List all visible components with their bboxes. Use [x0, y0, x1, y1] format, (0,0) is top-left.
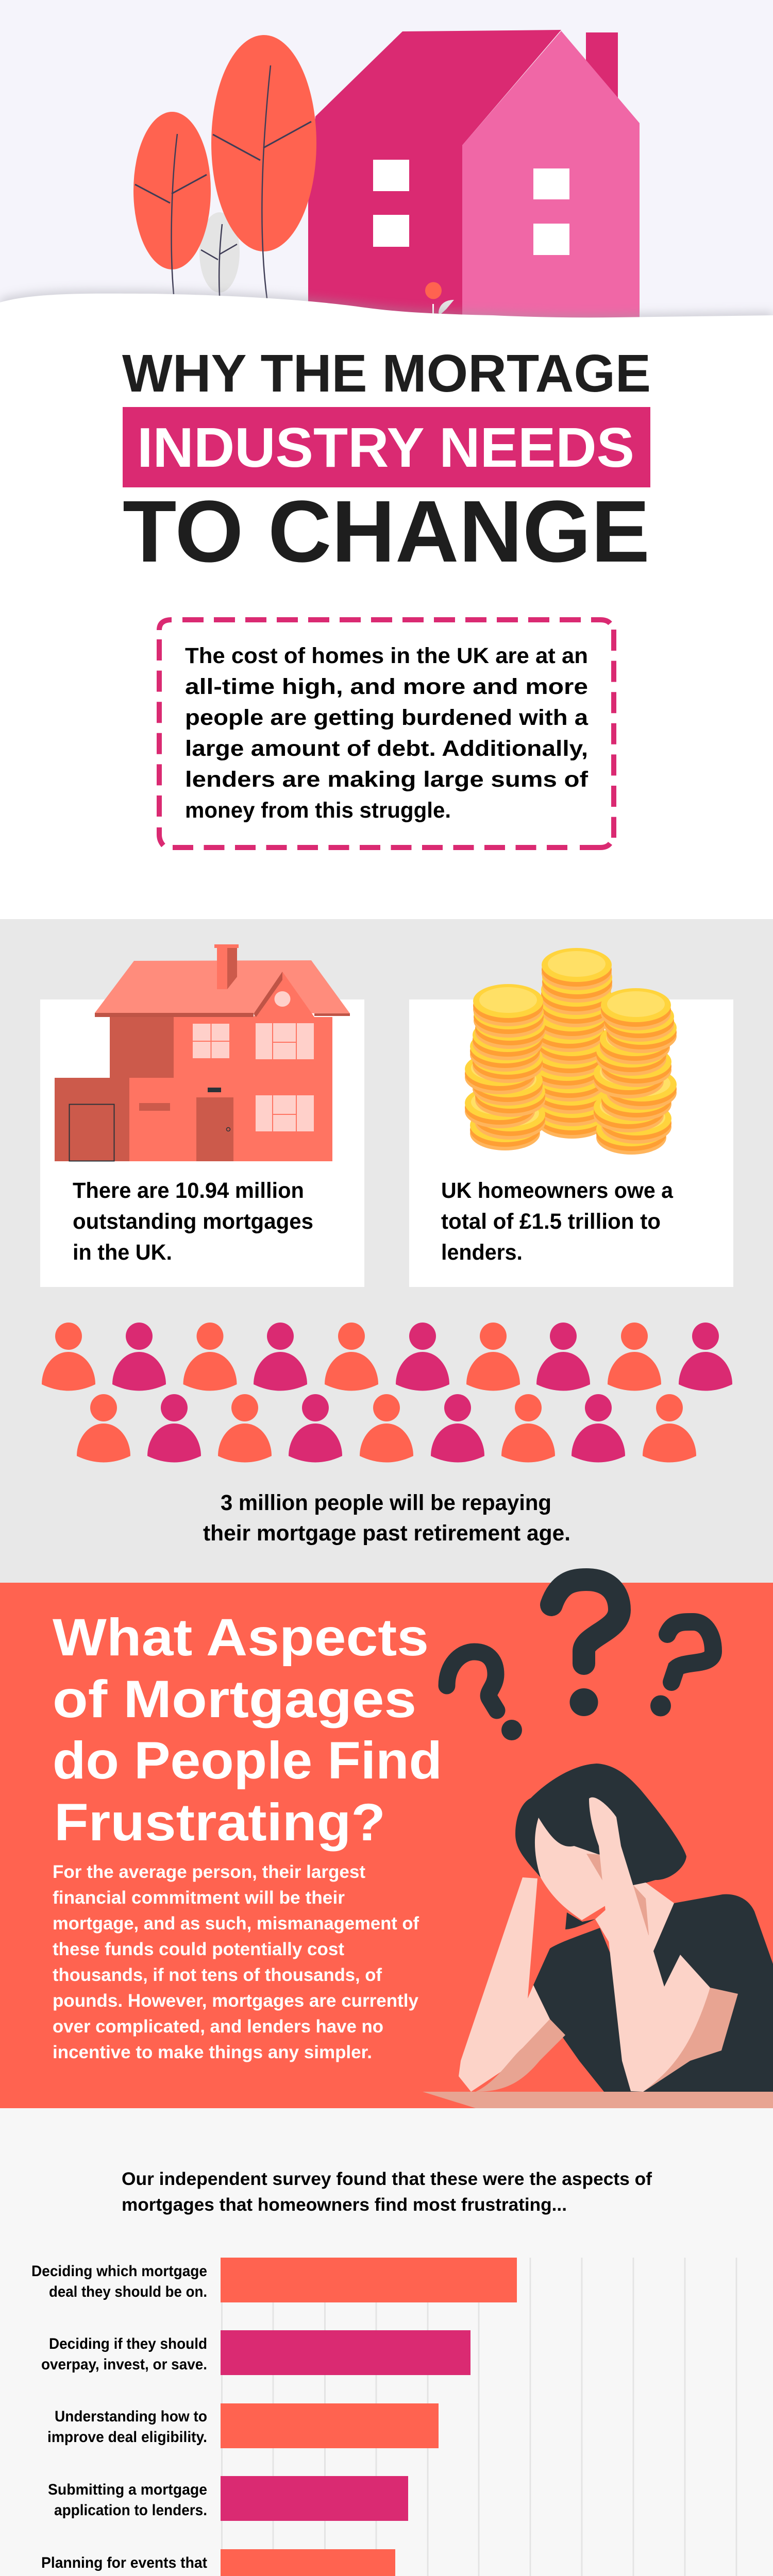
body text: thousands, if not tens of thousands, of [53, 1965, 382, 1985]
text: retirement age: 3 million people will be repaying [221, 1490, 551, 1515]
heading: Frustrating? [54, 1793, 385, 1852]
text: amount owed [441, 1178, 674, 1265]
text: amount owed: total of £1.5 trillion to [441, 1209, 661, 1234]
panel: stats [0, 919, 773, 1583]
chart category labels: application to lenders. [54, 2502, 207, 2519]
icon: question marks [447, 1580, 713, 1740]
icon: tall coral tree [211, 35, 316, 298]
card: debt [409, 948, 733, 1287]
text: retirement age: their mortgage past retirement age. [203, 1521, 570, 1546]
text: survey intro [122, 2169, 652, 2215]
text: outstanding mortgages [73, 1178, 313, 1265]
chart category labels: Deciding if they should [49, 2335, 207, 2352]
title: TO CHANGE [123, 483, 650, 581]
text: amount owed: UK homeowners owe a [441, 1178, 674, 1203]
icon: grey tree [199, 212, 240, 296]
intro callout: The cost of homes in the UK are at an [185, 643, 588, 668]
body text: financial commitment will be their [53, 1888, 345, 1908]
body text: over complicated, and lenders have no [53, 2016, 383, 2037]
icon: coin stacks [465, 948, 677, 1155]
illustration: frustrated woman [423, 1764, 773, 2108]
title: INDUSTRY NEEDS [137, 416, 634, 479]
header illustration [0, 0, 773, 340]
panel: survey chart [0, 2108, 773, 2576]
intro callout [159, 620, 614, 848]
text: amount owed: lenders. [441, 1240, 523, 1265]
bar chart [221, 2258, 517, 2576]
body text: incentive to make things any simpler. [53, 2042, 372, 2062]
icon: rows of people [42, 1323, 732, 1462]
body text: pounds. However, mortgages are currently [53, 1991, 419, 2011]
intro callout: people are getting burdened with a [185, 705, 589, 730]
icon: large pink house [308, 30, 640, 322]
heading: do People Find [53, 1731, 442, 1790]
body text: mortgage, and as such, mismanagement of [53, 1913, 419, 1934]
title [122, 344, 651, 581]
card: mortgages [40, 944, 364, 1287]
chart category labels: Deciding which mortgage [31, 2263, 207, 2280]
title: WHY THE MORTAGE [122, 344, 651, 403]
icon: coral house [55, 944, 350, 1161]
text: outstanding mortgages: outstanding mortgages [73, 1209, 313, 1234]
intro callout: large amount of debt. Additionally, [185, 736, 588, 761]
chart category labels [29, 2263, 207, 2576]
chart category labels: overpay, invest, or save. [41, 2356, 207, 2373]
chart category labels: Understanding how to [55, 2408, 207, 2425]
intro callout: lenders are making large sums of [185, 767, 589, 792]
heading: of Mortgages [53, 1670, 416, 1728]
heading: What Aspects [53, 1608, 429, 1667]
hill [0, 290, 773, 340]
text: outstanding mortgages: There are 10.94 million [73, 1178, 304, 1203]
text: outstanding mortgages: in the UK. [73, 1240, 172, 1265]
chart category labels: Submitting a mortgage [48, 2481, 207, 2498]
body text [53, 1862, 419, 2062]
chart category labels: Planning for events that [41, 2554, 207, 2571]
intro callout: all-time high, and more and more [185, 674, 588, 699]
text: survey intro: Our independent survey found that these were the aspects of [122, 2169, 652, 2189]
chart category labels: deal they should be on. [49, 2283, 207, 2300]
text: retirement age [203, 1490, 570, 1546]
text: survey intro: mortgages that homeowners find most frustrating... [122, 2195, 567, 2215]
body text: For the average person, their largest [53, 1862, 365, 1882]
chart category labels: improve deal eligibility. [47, 2429, 207, 2446]
panel: frustrations [0, 1580, 773, 2108]
icon: small plant [425, 282, 454, 314]
icon: left coral tree [133, 112, 211, 294]
intro callout: money from this struggle. [185, 798, 451, 823]
heading [53, 1608, 442, 1852]
body text: these funds could potentially cost [53, 1939, 344, 1959]
